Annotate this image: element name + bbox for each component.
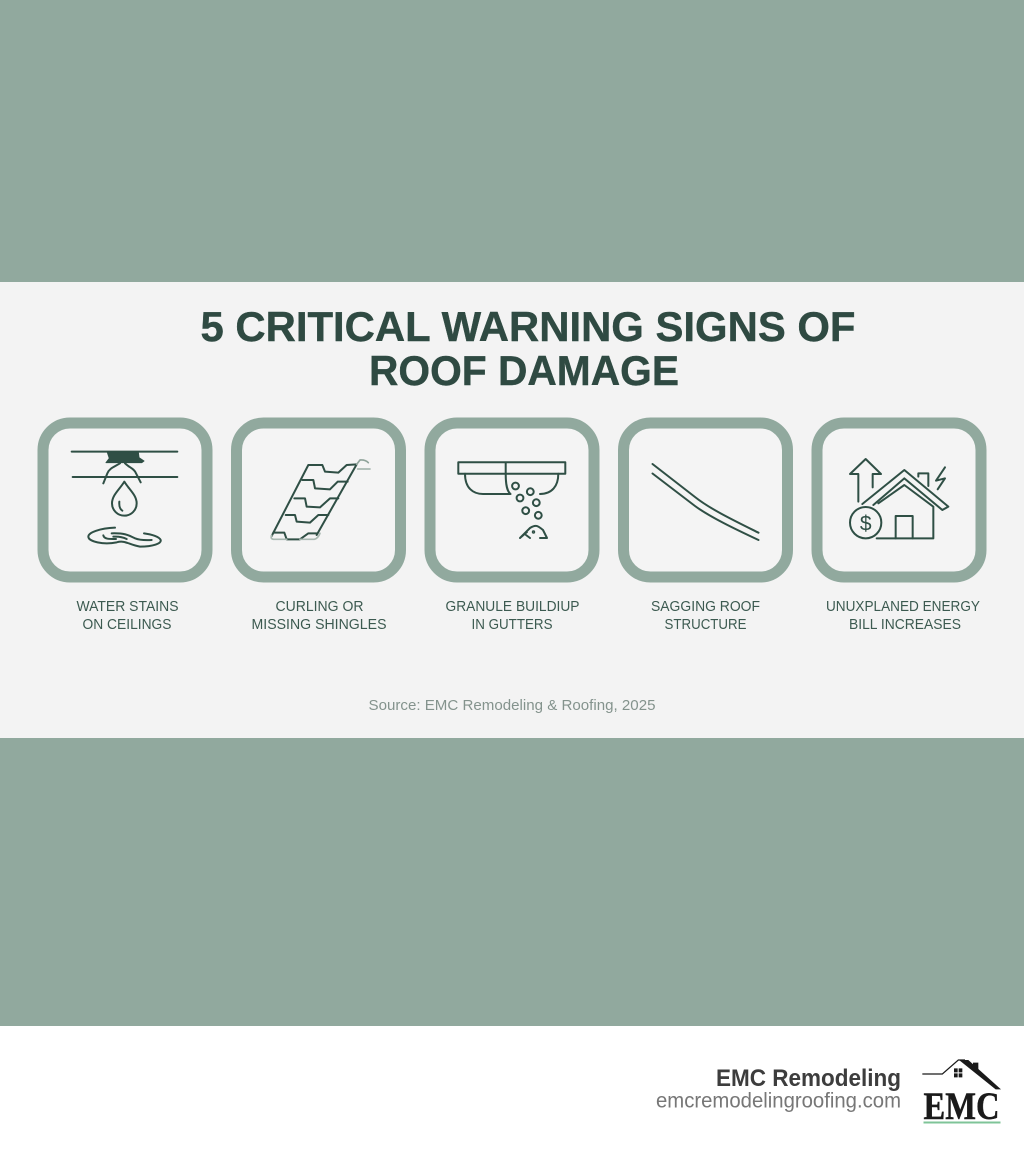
logo: EMC (924, 1085, 1000, 1128)
title: 5 CRITICAL WARNING SIGNS OF (200, 303, 856, 350)
label: MISSING SHINGLES (252, 616, 386, 633)
label: CURLING OR (276, 598, 364, 615)
icon: house, arrow and coin (850, 459, 948, 538)
icon: gutter and granules (458, 462, 565, 538)
label (252, 598, 386, 633)
label: UNUXPLANED ENERGY (826, 598, 980, 615)
label: WATER STAINS (76, 598, 178, 615)
label (651, 598, 760, 633)
label: SAGGING ROOF (651, 598, 760, 615)
icon: sagging lines (652, 464, 758, 540)
footer brand name: EMC Remodeling (716, 1065, 901, 1092)
label: STRUCTURE (664, 616, 746, 633)
logo (922, 1060, 1001, 1128)
label: BILL INCREASES (849, 616, 961, 633)
label: GRANULE BUILDIUP (446, 598, 580, 615)
card: water stains (43, 423, 207, 633)
card: granule buildup (430, 423, 594, 633)
footer url: emcremodelingroofing.com (656, 1090, 901, 1112)
top background band (0, 0, 1024, 282)
title (200, 303, 856, 394)
card: energy bills (817, 423, 981, 633)
title: ROOF DAMAGE (369, 347, 679, 394)
label: ON CEILINGS (82, 616, 172, 633)
source note: Source: EMC Remodeling & Roofing, 2025 (368, 697, 656, 714)
label: IN GUTTERS (472, 616, 552, 633)
icon: ceiling leak (72, 452, 177, 547)
icon: shingles (271, 460, 370, 539)
label (76, 598, 178, 633)
label (826, 598, 980, 633)
card: curling shingles (236, 423, 400, 633)
card: sagging roof (624, 423, 788, 633)
bottom background band (0, 738, 1024, 1026)
footer (656, 1060, 1001, 1128)
label (446, 598, 580, 633)
panel: warning signs (0, 282, 1024, 738)
icon: dollar sign: $ (860, 512, 872, 536)
